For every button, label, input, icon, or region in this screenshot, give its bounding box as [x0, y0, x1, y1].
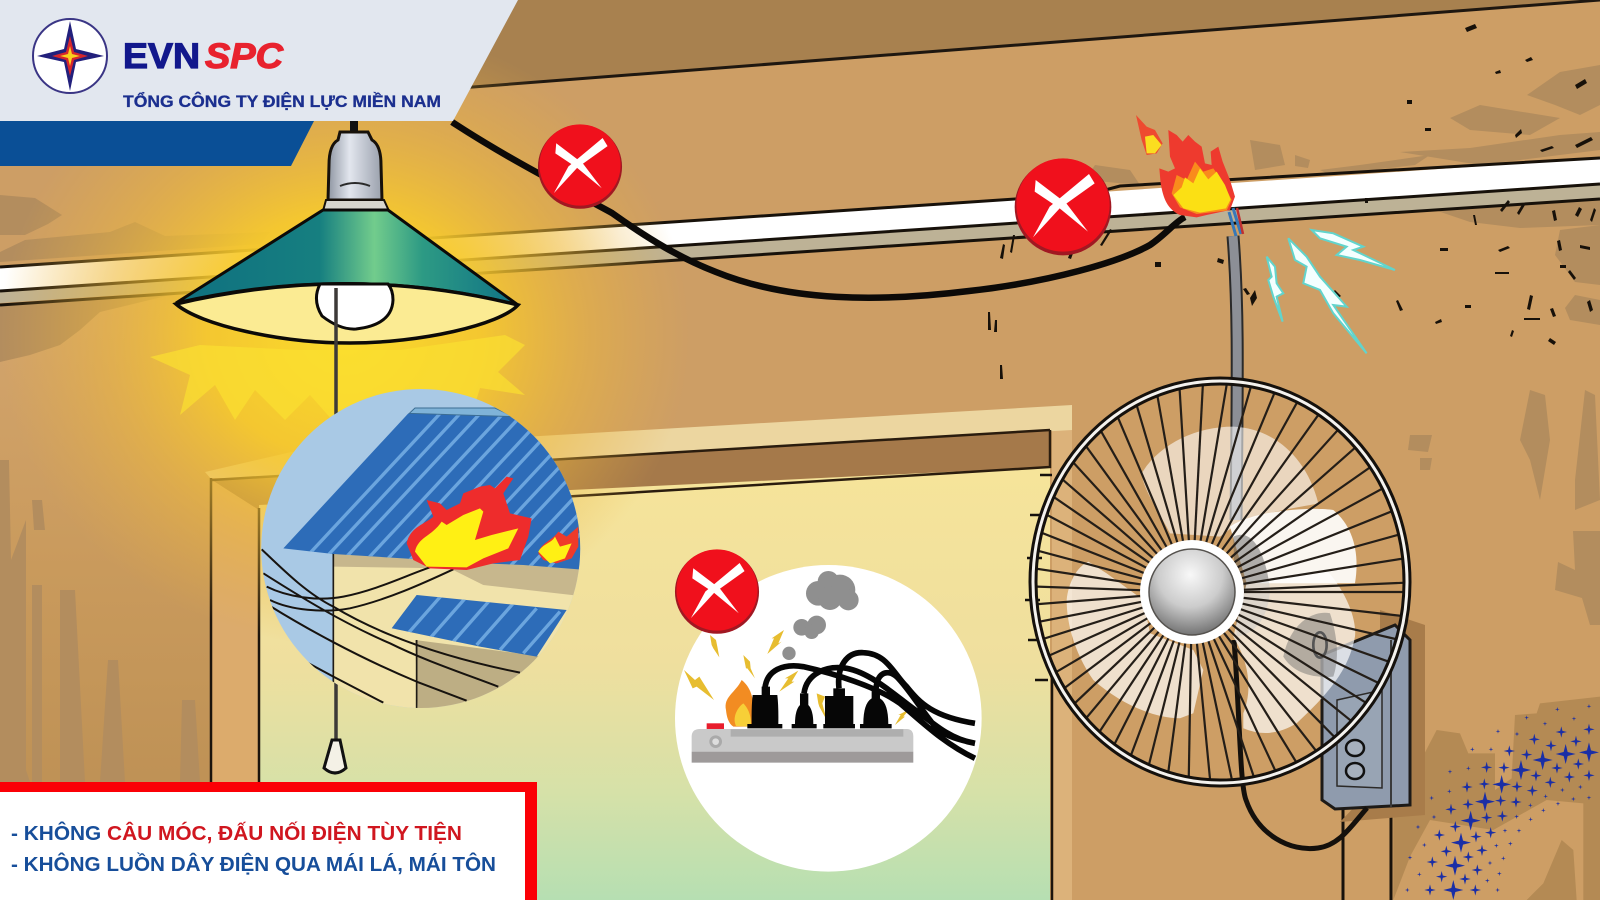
- house wall: [334, 566, 579, 708]
- lower right wall patches: [1393, 697, 1600, 900]
- warning text panel: [0, 782, 537, 900]
- warning sparks: [684, 630, 909, 725]
- logo icon: [33, 19, 107, 93]
- warning cross 2: [1015, 158, 1111, 255]
- circle: burning tin roof: [261, 389, 580, 708]
- company name: TỔNG CÔNG TY ĐIỆN LỰC MIỀN NAM: [123, 92, 441, 111]
- warning cross 3: [675, 549, 759, 634]
- brand name: [123, 37, 284, 76]
- circle: overloaded power strip: [675, 565, 982, 872]
- fan guard spokes: [1038, 386, 1402, 778]
- grey cable to fan: [1229, 208, 1243, 520]
- upper tin roof: [284, 414, 580, 570]
- plugs and cords: [747, 653, 975, 758]
- fan hub: [1140, 540, 1244, 644]
- door frame and opening: [205, 405, 1391, 900]
- lamp glow: [0, 15, 690, 655]
- wire sparks: [1267, 230, 1395, 353]
- strip flame: [726, 680, 755, 727]
- fan and outlet: [1025, 376, 1425, 852]
- decorative blue stars: [1405, 704, 1599, 900]
- warning cross 1: [538, 124, 622, 209]
- fan guard ring: [1025, 381, 1407, 783]
- blue band: [0, 121, 314, 166]
- brand name: SPC: [205, 37, 284, 76]
- warning line 1: - KHÔNG CÂU MÓC, ĐẤU NỐI ĐIỆN TÙY TIỆN: [11, 821, 462, 845]
- header panel: [0, 0, 518, 166]
- fan blades: [1067, 427, 1357, 733]
- wall stains: [0, 65, 1600, 782]
- brand name: EVN: [123, 37, 200, 76]
- roof flames: [407, 477, 532, 570]
- wiring conduit: [0, 158, 1600, 305]
- hanging lamp: [176, 120, 518, 343]
- flame on wire: [1136, 115, 1235, 217]
- warning line 2: - KHÔNG LUỒN DÂY ĐIỆN QUA MÁI LÁ, MÁI TÔN: [11, 852, 496, 876]
- fan power cord: [1234, 640, 1367, 849]
- pull cord: [324, 288, 346, 773]
- black hanging wire: [452, 122, 1185, 298]
- lower tin roof: [392, 595, 566, 656]
- smoke clouds: [782, 571, 859, 660]
- power strip: [692, 723, 913, 763]
- wall outlet: [1322, 610, 1425, 822]
- electric wires: [262, 549, 520, 703]
- soot specks: [988, 24, 1596, 379]
